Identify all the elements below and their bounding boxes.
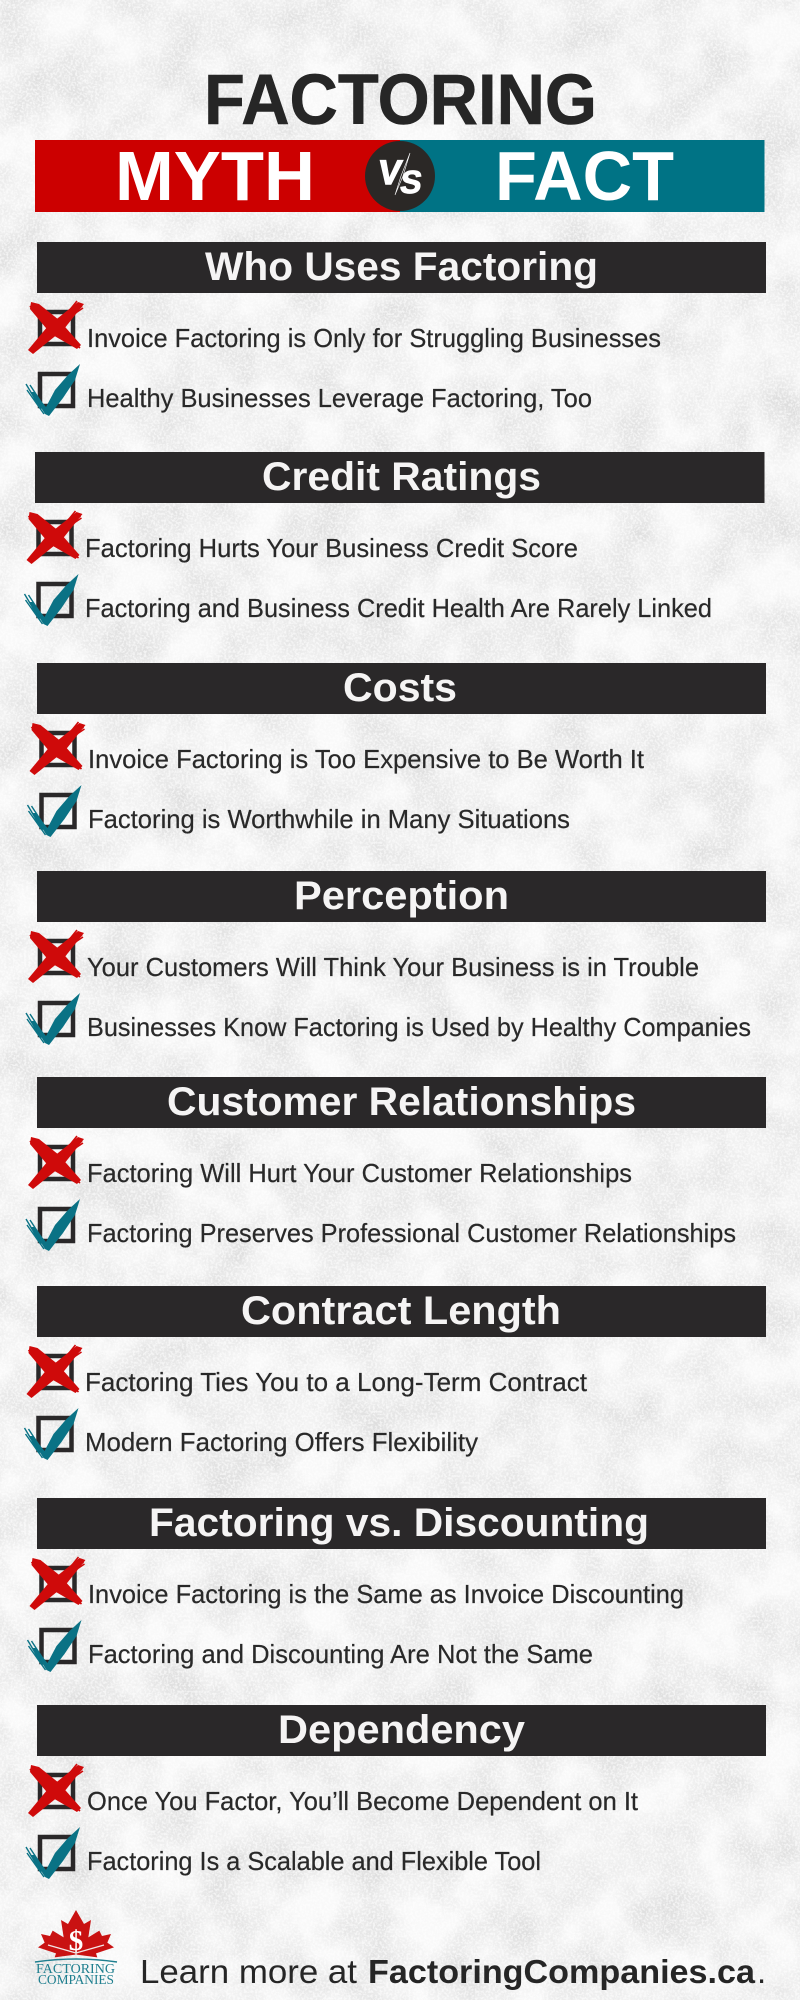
logo arc xyxy=(35,1959,117,1962)
heading xyxy=(37,663,766,714)
icon: myth cross xyxy=(28,1136,84,1189)
icon: myth cross xyxy=(28,1764,84,1817)
icon: myth cross xyxy=(26,1345,82,1398)
logo: factoring companies: COMPANIES xyxy=(38,1973,114,1988)
section: dependency: Dependency xyxy=(278,1708,526,1752)
myth text: Invoice Factoring is Too Expensive to Be Worth It xyxy=(88,744,645,774)
myth text: Factoring Will Hurt Your Customer Relationships xyxy=(87,1158,632,1188)
vs badge xyxy=(365,141,435,211)
section: who uses factoring xyxy=(26,242,766,416)
icon: myth cross xyxy=(30,1557,86,1610)
icon: fact check xyxy=(24,574,78,626)
section: customer relationships xyxy=(26,1077,766,1251)
icon: myth cross xyxy=(26,511,82,564)
footer call to action xyxy=(140,1953,766,1990)
fact text: Modern Factoring Offers Flexibility xyxy=(85,1427,478,1457)
vs badge: V xyxy=(376,154,404,192)
footer call to action: Learn more at xyxy=(140,1953,357,1990)
icon: fact check xyxy=(26,1827,80,1879)
fact text: Factoring is Worthwhile in Many Situations xyxy=(88,804,570,834)
title: FACTORING xyxy=(204,61,597,140)
fact text: Factoring and Discounting Are Not the Same xyxy=(88,1639,593,1669)
icon: myth cross xyxy=(28,301,84,354)
heading xyxy=(37,242,766,293)
section: factoring vs discounting: Factoring vs. Discounting xyxy=(149,1501,649,1545)
heading xyxy=(37,1286,766,1337)
icon: fact check xyxy=(28,1620,82,1672)
section: factoring vs discounting xyxy=(28,1498,766,1672)
section: who uses factoring: Who Uses Factoring xyxy=(205,245,598,289)
icon: fact check xyxy=(26,993,80,1045)
icon: fact check xyxy=(26,1199,80,1251)
heading xyxy=(37,1498,766,1549)
section: perception: Perception xyxy=(294,874,509,918)
icon: myth cross xyxy=(30,722,86,775)
myth text: Factoring Hurts Your Business Credit Score xyxy=(85,533,578,563)
section: dependency xyxy=(26,1705,766,1879)
section: costs xyxy=(28,663,766,837)
fact text: Factoring Is a Scalable and Flexible Tool xyxy=(87,1846,541,1876)
fact text: Factoring and Business Credit Health Are Rarely Linked xyxy=(85,593,712,623)
icon: fact check xyxy=(24,1408,78,1460)
vs badge: S xyxy=(398,164,424,200)
logo text: FACTORING xyxy=(36,1962,115,1977)
section: costs: Costs xyxy=(343,666,457,710)
fact text: Factoring Preserves Professional Customer Relationships xyxy=(87,1218,736,1248)
logo: factoring companies xyxy=(35,1910,117,1988)
fact text: Healthy Businesses Leverage Factoring, Too xyxy=(87,383,592,413)
panel: myth xyxy=(35,140,400,212)
section: credit ratings xyxy=(24,452,764,626)
section: contract length xyxy=(24,1286,766,1460)
icon: myth cross xyxy=(28,930,84,983)
section: contract length: Contract Length xyxy=(241,1289,561,1333)
fact label: FACT xyxy=(495,137,674,215)
myth text: Invoice Factoring is the Same as Invoice Discounting xyxy=(88,1579,684,1609)
icon: fact check xyxy=(26,364,80,416)
section: credit ratings: Credit Ratings xyxy=(262,455,541,499)
myth text: Factoring Ties You to a Long-Term Contract xyxy=(85,1367,588,1397)
heading xyxy=(35,452,764,503)
heading xyxy=(37,871,766,922)
myth text: Your Customers Will Think Your Business is in Trouble xyxy=(87,952,699,982)
footer call to action: . xyxy=(757,1953,766,1990)
heading xyxy=(37,1077,766,1128)
myth label: MYTH xyxy=(115,137,315,215)
footer call to action: FactoringCompanies.ca xyxy=(368,1953,756,1990)
banner: myth vs fact xyxy=(35,137,764,215)
myth text: Once You Factor, You’ll Become Dependent on It xyxy=(87,1786,639,1816)
icon: fact check xyxy=(28,785,82,837)
section: perception xyxy=(26,871,766,1045)
icon: maple leaf: $ xyxy=(69,1925,83,1957)
panel: fact xyxy=(400,140,764,212)
fact text: Businesses Know Factoring is Used by Healthy Companies xyxy=(87,1012,751,1042)
heading xyxy=(37,1705,766,1756)
section: customer relationships: Customer Relationships xyxy=(167,1080,636,1124)
myth text: Invoice Factoring is Only for Struggling Businesses xyxy=(87,323,661,353)
